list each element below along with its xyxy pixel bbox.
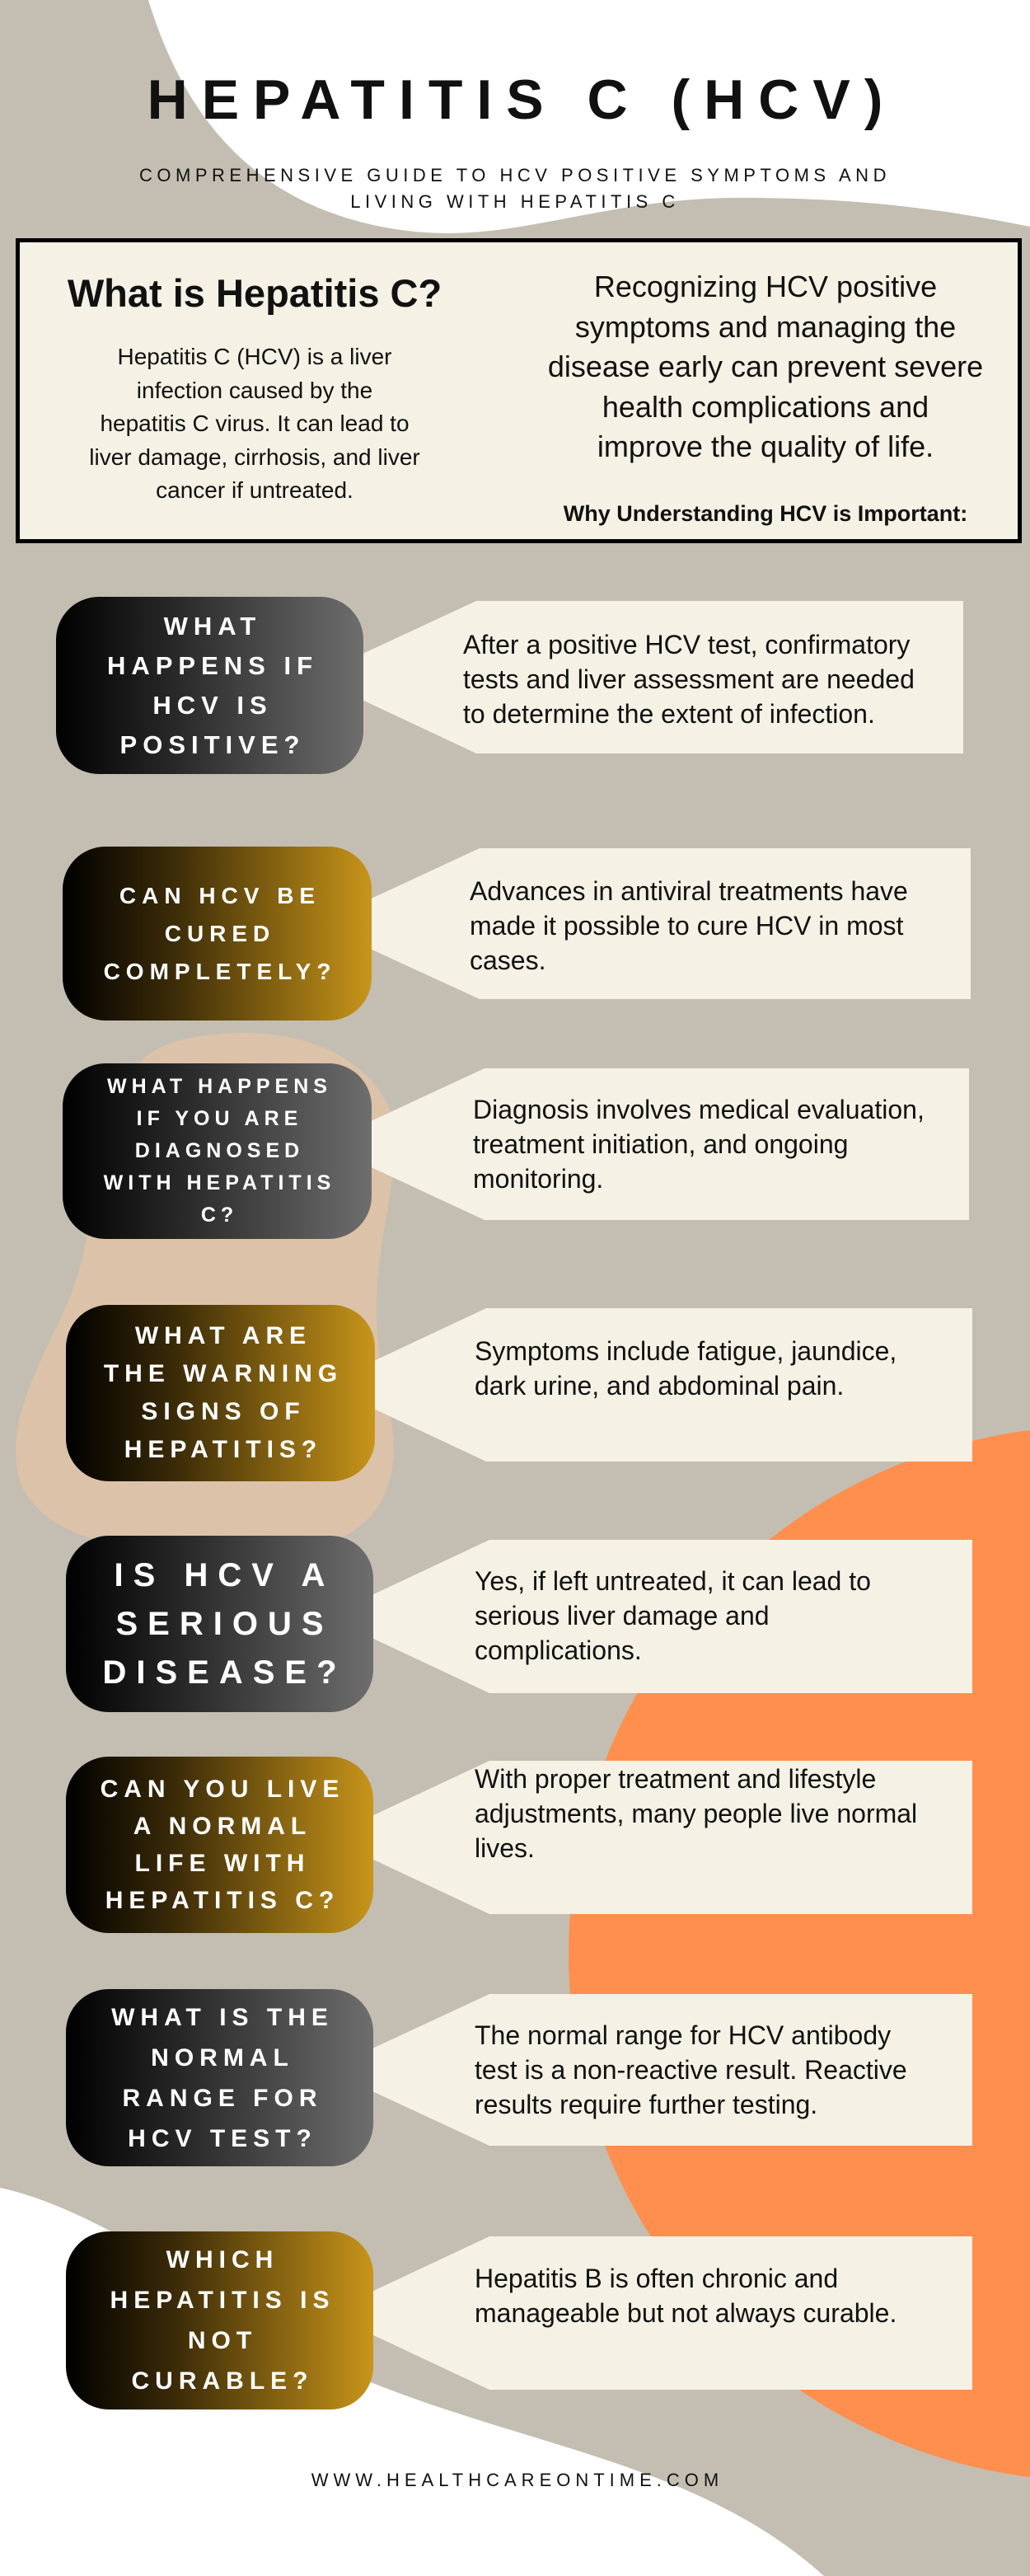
subtitle: COMPREHENSIVE GUIDE TO HCV POSITIVE SYMPTOMS AND bbox=[139, 165, 891, 185]
text 5: Yes, if left untreated, it can lead to bbox=[475, 1566, 871, 1596]
pill 5: DISEASE? bbox=[102, 1654, 347, 1690]
pill 6: LIFE WITH bbox=[135, 1850, 310, 1877]
callout 7 bbox=[373, 1994, 972, 2146]
pill 2: COMPLETELY? bbox=[104, 958, 336, 984]
pill 1 bbox=[56, 597, 363, 774]
pill 4: WHAT ARE bbox=[135, 1322, 311, 1349]
text 5 bbox=[475, 1566, 871, 1665]
text 4: Symptoms include fatigue, jaundice, bbox=[475, 1336, 897, 1366]
text 8 bbox=[475, 2264, 897, 2328]
callout 6 bbox=[373, 1761, 972, 1914]
pill 3: DIAGNOSED bbox=[135, 1139, 304, 1162]
pill 8: WHICH bbox=[166, 2246, 279, 2273]
subtitle: LIVING WITH HEPATITIS C bbox=[350, 191, 680, 212]
text: definition bbox=[89, 344, 420, 503]
subtitle bbox=[139, 165, 891, 212]
pill 7: NORMAL bbox=[151, 2044, 294, 2071]
row 3 bbox=[63, 1063, 969, 1239]
text 2 bbox=[470, 876, 908, 975]
panel: intro bbox=[16, 238, 1022, 543]
text 2: made it possible to cure HCV in most bbox=[470, 911, 903, 941]
pill 6 bbox=[66, 1757, 373, 1933]
pill 5 bbox=[66, 1536, 373, 1712]
pill 8: HEPATITIS IS bbox=[110, 2287, 335, 2314]
pill 4: THE WARNING bbox=[104, 1360, 343, 1387]
text 2: cases. bbox=[470, 945, 545, 975]
callout 2 bbox=[372, 848, 971, 999]
text 3: treatment initiation, and ongoing bbox=[473, 1129, 848, 1159]
text 4: dark urine, and abdominal pain. bbox=[475, 1371, 844, 1401]
pill 2 bbox=[63, 847, 372, 1021]
pill 3: IF YOU ARE bbox=[137, 1107, 302, 1130]
pill 8: NOT bbox=[188, 2327, 257, 2354]
pill 1: WHAT bbox=[164, 612, 261, 640]
text: definition: Hepatitis C (HCV) is a liver bbox=[118, 344, 391, 369]
pill 7: HCV TEST? bbox=[128, 2125, 317, 2151]
pill 3: C? bbox=[201, 1204, 238, 1227]
pill 5: IS HCV A bbox=[115, 1556, 335, 1593]
pill 8 bbox=[66, 2231, 373, 2409]
pill 7: RANGE FOR bbox=[122, 2084, 322, 2112]
pill 8: CURABLE? bbox=[132, 2367, 313, 2395]
text: importance: Recognizing HCV positive bbox=[594, 270, 937, 303]
text 6 bbox=[475, 1764, 917, 1863]
pill 6: A NORMAL bbox=[133, 1813, 311, 1840]
text 2: Advances in antiviral treatments have bbox=[470, 876, 908, 906]
heading: what is hepatitis c: What is Hepatitis C? bbox=[68, 271, 442, 315]
text 1: After a positive HCV test, confirmatory bbox=[463, 630, 910, 659]
pill 7 bbox=[66, 1989, 373, 2166]
text: importance bbox=[548, 270, 983, 463]
pill 2: CAN HCV BE bbox=[119, 882, 321, 908]
text 1: tests and liver assessment are needed bbox=[463, 664, 915, 694]
text: why understanding: Why Understanding HCV is Important: bbox=[564, 501, 967, 526]
callout 3 bbox=[372, 1068, 969, 1220]
text: importance: health complications and bbox=[602, 389, 929, 424]
pill 6: CAN YOU LIVE bbox=[101, 1776, 344, 1803]
pill 3: WITH HEPATITIS bbox=[104, 1171, 335, 1194]
text 1 bbox=[463, 630, 915, 729]
text: definition: cancer if untreated. bbox=[156, 477, 353, 503]
text: importance: disease early can prevent severe bbox=[548, 350, 983, 383]
text: definition: infection caused by the bbox=[137, 378, 372, 403]
text 6: With proper treatment and lifestyle bbox=[475, 1764, 876, 1794]
pill 4 bbox=[66, 1305, 375, 1481]
pill 4: SIGNS OF bbox=[141, 1398, 306, 1425]
text: importance: improve the quality of life. bbox=[597, 429, 934, 463]
text 6: adjustments, many people live normal bbox=[475, 1799, 917, 1828]
row 7 bbox=[66, 1989, 972, 2166]
row 1 bbox=[56, 597, 963, 774]
text 8: manageable but not always curable. bbox=[475, 2298, 897, 2328]
text 7: results require further testing. bbox=[475, 2090, 817, 2119]
row 5 bbox=[66, 1536, 972, 1712]
title: HEPATITIS C (HCV) bbox=[147, 68, 897, 131]
pill 3: WHAT HAPPENS bbox=[107, 1075, 332, 1098]
pill 7: WHAT IS THE bbox=[111, 2003, 334, 2031]
callout 1 bbox=[363, 601, 963, 753]
pill 4: HEPATITIS? bbox=[124, 1436, 322, 1463]
callout 5 bbox=[373, 1540, 972, 1693]
pill 3 bbox=[63, 1063, 372, 1239]
row 4 bbox=[66, 1305, 972, 1481]
text 7: test is a non-reactive result. Reactive bbox=[475, 2055, 907, 2085]
text 4 bbox=[475, 1336, 897, 1401]
text 7 bbox=[475, 2020, 907, 2119]
text 6: lives. bbox=[475, 1833, 535, 1863]
text 7: The normal range for HCV antibody bbox=[475, 2020, 891, 2050]
pill 1: POSITIVE? bbox=[120, 730, 305, 758]
text 3 bbox=[473, 1095, 925, 1194]
text 3: Diagnosis involves medical evaluation, bbox=[473, 1095, 925, 1124]
text: definition: liver damage, cirrhosis, and liver bbox=[89, 444, 420, 470]
footer url: WWW.HEALTHCAREONTIME.COM bbox=[311, 2470, 723, 2490]
callout 4 bbox=[375, 1308, 972, 1462]
row 6 bbox=[66, 1757, 972, 1933]
callout 8 bbox=[373, 2236, 972, 2390]
row 2 bbox=[63, 847, 971, 1021]
pill 5: SERIOUS bbox=[115, 1606, 334, 1642]
pill 2: CURED bbox=[165, 920, 275, 946]
text: importance: symptoms and managing the bbox=[575, 310, 956, 343]
text: definition: hepatitis C virus. It can lead to bbox=[100, 411, 410, 436]
pill 6: HEPATITIS C? bbox=[105, 1887, 339, 1914]
row 8 bbox=[66, 2231, 972, 2409]
pill 1: HAPPENS IF bbox=[107, 651, 318, 679]
text 3: monitoring. bbox=[473, 1164, 603, 1194]
text 1: to determine the extent of infection. bbox=[463, 699, 875, 729]
pill 1: HCV IS bbox=[152, 691, 273, 719]
text 5: complications. bbox=[475, 1635, 642, 1665]
text 5: serious liver damage and bbox=[475, 1601, 770, 1631]
text 8: Hepatitis B is often chronic and bbox=[475, 2264, 838, 2293]
